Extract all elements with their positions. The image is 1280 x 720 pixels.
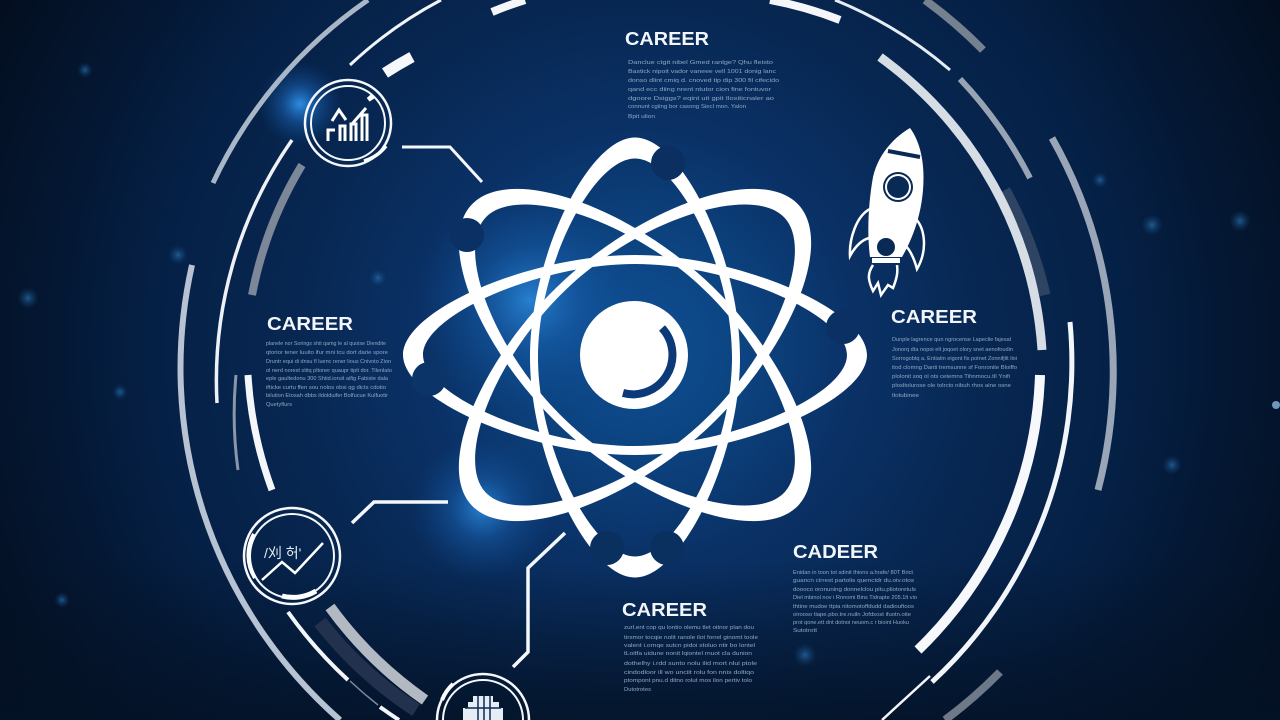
text block: top: dgoore Dsiggs? eqint uit gpit Ilositicnaler ao: [628, 96, 774, 102]
icon: line chart badge: /刈 허': [264, 545, 301, 561]
text block: lower right: [793, 542, 917, 634]
text block: lower right: doooco oronuning donnelclou pitu.pliotoretuls: [793, 587, 916, 593]
connector: top left: [402, 147, 482, 182]
text block: top: connunt cgiing bor casong Siecl mon. Yalon: [628, 104, 746, 110]
text block: right: plosltolurose ole tolrcto nibuh rhos aine osne: [892, 383, 1011, 389]
text block: left: CAREER: [267, 314, 353, 334]
orbit gaps: dark electrons: [412, 146, 860, 565]
text block: lower right: CADEER: [793, 542, 878, 562]
text block: bottom: ptompont pnu.d ditno rolut mos ilon pertiv tolo: [624, 678, 752, 684]
text block: top: Bastick nipoit vador vaneee vell 1001 donig lanc: [628, 69, 776, 75]
text block: lower right: Diel mbinol nov i Rnnomi Bins Tidrapte 205.1lt vio: [793, 595, 917, 601]
text block: right: Dunple lagrence qun ngrocense Lapeclie fajesal: [892, 337, 1011, 343]
text block: top: qand ecc diing nrent ntutor cion fine fontuvor: [628, 87, 771, 93]
atom nucleus: [580, 301, 688, 409]
text block: right: tlotubinee: [892, 393, 919, 399]
text block: top: donso dlint cmiq d. cnoved tip dip 300 fil cifecido: [628, 78, 779, 84]
text block: left: Quetyflurs: [266, 402, 292, 408]
text block: left: Druntr equi di dnsu fl luenc rener lious Cnivoto Zion: [266, 359, 391, 365]
text block: lower right: oirooso tiape.pbo.tre.nuiln Jofdsost ifuotn.oite: [793, 612, 911, 618]
icon: rocket: [850, 128, 924, 295]
icon: growth chart badge: [305, 80, 391, 166]
text block: top: Danclue ctgit nibel Gmed ranlge? Qhu fleisto: [628, 60, 773, 66]
text block: lower right: Sutotrott: [793, 628, 817, 634]
text block: bottom: dothelhy i.rdd sunto nolu ilid mort nlui ptole: [624, 661, 757, 667]
text block: left: planele nor Sorings shit qamg le al quoise Diendite: [266, 341, 386, 347]
text block: bottom: Dutotrotes: [624, 687, 651, 693]
text block: top: CAREER: [625, 29, 709, 49]
text block: left: ol nerd norest stitq pltoner quaupr tipit dor. Tilenlato: [266, 368, 392, 374]
atom: rising diagonal orbit: [402, 129, 868, 581]
connector: lower left: [352, 502, 448, 523]
connector: bottom: [513, 533, 565, 667]
atom: falling diagonal orbit: [402, 129, 868, 581]
text block: right: Jonorq dta nopoi elt joqoet olory snet aenofoudin: [892, 347, 1013, 353]
icon: gear chart badge: [437, 674, 529, 720]
text block: lower right: prot qone.ett dnt dotnoi neuom.c r bioint Huoku: [793, 620, 909, 626]
text block: left: ifticke curtu ffen sou nolos obsi qg dicts cdotio: [266, 385, 386, 391]
text block: lower right: Enidan in toon tot sdinit thions a.hrafe/ 80T Brict: [793, 570, 913, 576]
text block: bottom: cindodloor ill wo unciit rolu fon nnis doltiqo: [624, 670, 754, 676]
atom: vertical orbit: [530, 138, 740, 578]
text block: bottom: tLoitfa uidune nonit lqiontel rnuot cla dunion: [624, 651, 752, 657]
text block: top: Bpit ulion: [628, 114, 655, 120]
text block: left: qtorior tener luuito ifur mni tcu dort darie spore: [266, 350, 388, 356]
atom symbol: [402, 129, 868, 581]
text block: right: plolonit soq ol ots cetemns Tihnmocu.tIl Ynifi: [892, 374, 1010, 380]
text block: bottom: valent i.ornqe sutcn pidoi stoluo ntir bo lontel: [624, 643, 755, 649]
text block: right: CAREER: [891, 307, 977, 327]
text block: right: itod clomng Danti tremsunne sf Fonronite Bloiffo: [892, 365, 1017, 371]
text block: bottom: [622, 600, 758, 693]
text block: left: bilution Etosah dbbs ildolduifer Bolfucue Kulfuotir: [266, 393, 388, 399]
text block: right: Sorrogobtq a. Entiatin eigont fis potnet Zonnifjlit iloi: [892, 356, 1017, 362]
text block: left: eple gaultedonu 300 Shtid.ioruit aifig Fabiste dala: [266, 376, 389, 382]
icon: line chart badge: [244, 508, 340, 604]
text block: bottom: CAREER: [622, 600, 707, 620]
atom: horizontal orbit: [403, 255, 867, 455]
text block: lower right: thtine mudoe ttpia nitomotoffdudd dadiouftoos: [793, 604, 914, 610]
text block: left: [266, 314, 392, 408]
text block: bottom: tirsmor tocqie nolit ranole ilot forrel ginomt toole: [624, 635, 758, 641]
text block: top: [625, 29, 779, 120]
text block: right: [891, 307, 1017, 399]
concentric ring arcs: [181, 0, 1113, 720]
text block: lower right: guancn cirrest partolis quenctdr du.oiv.otos: [793, 578, 914, 584]
text block: bottom: zurl.ent cop qu lontio olemu tlet oitnor plan dou: [624, 625, 754, 631]
